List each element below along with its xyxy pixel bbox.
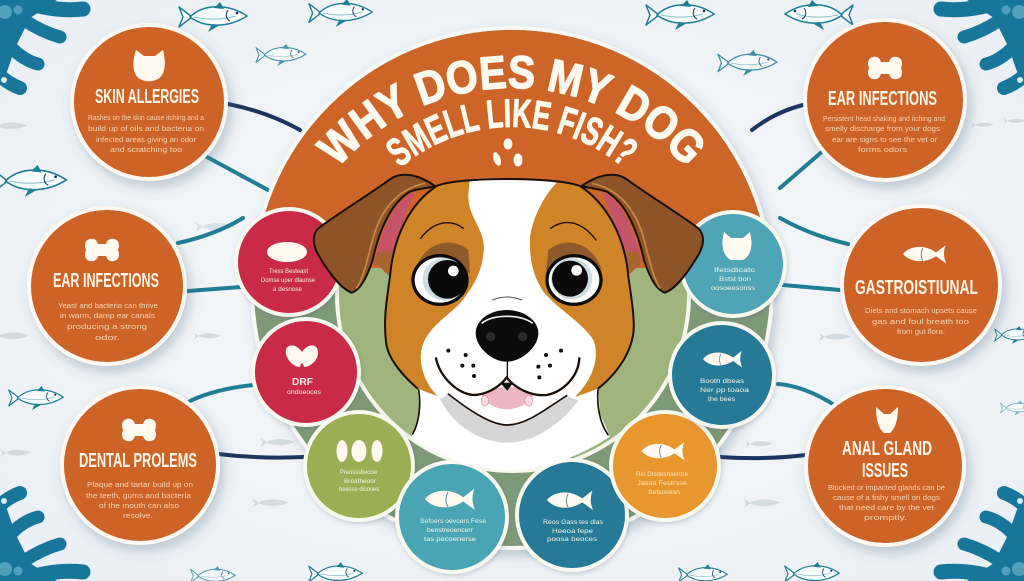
title: SMELL LIKE FISH? xyxy=(386,98,638,166)
corner splash: top right xyxy=(941,0,1024,88)
text: red 1 lines: Domse uper dlaunse xyxy=(261,277,315,284)
text: green lines xyxy=(339,469,380,493)
text: green lines: beesso disoses xyxy=(339,486,380,493)
body text: producing a strong xyxy=(67,324,147,331)
text: teal right lines: Bstst bon xyxy=(719,276,751,283)
panel: anal gland issues xyxy=(806,387,964,545)
body text: promptly. xyxy=(864,515,907,522)
heading: SKIN ALLERGIES xyxy=(95,86,199,108)
corner splash: bottom right xyxy=(941,493,1024,581)
body text xyxy=(58,303,158,342)
body text: Rashes on the skin cause itching and a xyxy=(88,115,204,122)
icon: fish xyxy=(903,245,946,264)
body text: ear are signs to see the vet or xyxy=(832,137,938,144)
central medallion xyxy=(250,26,774,550)
nose xyxy=(476,310,538,362)
icon: cat head xyxy=(722,232,752,260)
body text: that need care by the vet xyxy=(839,505,934,512)
icon: bone xyxy=(868,57,902,79)
neck lines xyxy=(413,390,608,435)
panel: dental problems xyxy=(62,387,218,543)
icon: fish xyxy=(547,491,593,510)
text: red 1 lines xyxy=(261,268,315,293)
chin shadow xyxy=(440,394,578,443)
panel: small circle blue bottom xyxy=(517,460,627,570)
icon: bone xyxy=(85,239,119,261)
body text: Persistent head shaking and itching and xyxy=(823,116,945,123)
heading: ISSUES xyxy=(862,460,908,482)
body text: build up of oils and bacteria on xyxy=(88,126,204,133)
text: blue right lines xyxy=(700,378,749,403)
head outline xyxy=(385,179,634,388)
icon: lungs xyxy=(286,345,318,367)
text: green lines: Preosssbeccer xyxy=(340,469,379,476)
text: blue lines xyxy=(543,519,604,543)
text: blue lines: poosa beoces xyxy=(547,536,598,543)
right ear xyxy=(582,175,703,293)
eye patches and brows xyxy=(415,222,602,273)
text: blue lines: Reos Gass tes dlas xyxy=(543,519,604,526)
corner splash: bottom left xyxy=(0,493,83,581)
icon: bowl xyxy=(267,242,307,262)
panel: ear infections left xyxy=(29,208,185,364)
body text: forms odors xyxy=(858,147,908,154)
text: red 1 lines: a desnose xyxy=(273,286,302,293)
icon: three teeth xyxy=(336,440,382,462)
icon: gland xyxy=(876,407,898,433)
mouth xyxy=(436,358,579,425)
body text: cause of a fishy smell on dogs xyxy=(833,495,941,502)
panel: small circle orange xyxy=(611,412,719,520)
heading xyxy=(842,438,932,482)
body text: Yeast and bacteria can thrive xyxy=(58,303,158,310)
text: blue right lines: Ner pp toaoa xyxy=(700,387,749,394)
text: red 2 line: ondoeoces xyxy=(287,389,322,396)
panel: small circle teal right xyxy=(681,212,785,316)
icon: smell droplets xyxy=(491,138,522,167)
text: green lines: Broatheoor xyxy=(344,478,377,485)
panel: small circle red 1 xyxy=(236,209,342,315)
text: orange lines: Rin Disdeshserore xyxy=(636,471,688,478)
icon: fish xyxy=(642,442,685,461)
text: orange lines xyxy=(636,471,688,496)
panel: skin allergies xyxy=(72,25,226,179)
text: blue right lines: the bees xyxy=(708,396,736,403)
whisker dots xyxy=(446,349,563,379)
heading: ANAL GLAND xyxy=(842,438,932,460)
text: red 1 lines: Tress Besteast xyxy=(269,268,308,275)
title: WHY DOES MY DOG xyxy=(314,55,704,164)
text: teal lines: benstreoencerr xyxy=(427,527,474,534)
icon: cat head xyxy=(133,50,165,81)
icon: fish xyxy=(703,351,742,368)
dog illustration xyxy=(314,175,703,470)
panel: gastrointestinal xyxy=(842,206,1000,364)
body text xyxy=(823,116,945,154)
left ear xyxy=(314,175,435,293)
connector lines xyxy=(178,104,848,458)
text: blue right lines: Booth dbeas xyxy=(700,378,745,385)
text: blue lines: Heeoa fepe xyxy=(552,528,593,535)
head xyxy=(385,179,634,407)
text: DRF label: DRF xyxy=(292,377,313,388)
text: orange lines: Jasso Festrsse xyxy=(637,480,687,487)
body text: gas and foul breath too xyxy=(872,319,969,326)
body text: odor. xyxy=(95,335,120,342)
body text: from gut flora. xyxy=(897,329,945,336)
icon: bone xyxy=(122,419,156,441)
body text: the teeth, gums and bacteria xyxy=(86,493,191,500)
body text: resolve. xyxy=(123,513,153,520)
body text xyxy=(86,482,193,520)
body text: in warm, damp ear canals xyxy=(60,313,156,320)
text: teal right lines xyxy=(711,267,756,292)
icon: fish xyxy=(425,489,475,510)
body text: Plaque and tartar build up on xyxy=(87,482,193,489)
left eye xyxy=(411,254,469,306)
body text: Blocked or impacted glands can be xyxy=(828,485,945,492)
heading: DENTAL PROLEMS xyxy=(79,450,197,472)
body text: Diets and stomach upsets cause xyxy=(865,308,977,315)
body text xyxy=(88,115,204,154)
body text: of the mouth can also xyxy=(99,503,179,510)
heading: EAR INFECTIONS xyxy=(53,270,159,292)
text: teal lines: tas pecoenerse xyxy=(424,536,476,543)
text: teal right lines: oosoeesonss xyxy=(711,285,756,292)
text: teal right lines: Ifetsdtcatc xyxy=(714,267,756,274)
text: teal lines: Sefoers oevcers Fese xyxy=(420,518,486,525)
body text: smelly discharge from your dogs xyxy=(825,126,941,133)
corner splash: top left xyxy=(0,0,83,88)
panel: small circle blue right xyxy=(670,323,774,427)
text: teal lines xyxy=(420,518,486,543)
body text xyxy=(828,485,945,522)
panel: small circle red 2 xyxy=(253,319,359,425)
panel: small circle teal bottom xyxy=(397,462,507,572)
panel: ear infections right xyxy=(805,20,965,180)
text: orange lines: Setsosesn xyxy=(648,489,680,496)
right eye xyxy=(545,254,603,306)
body text: infected areas giving an odor xyxy=(96,137,197,144)
muzzle wrinkle xyxy=(493,297,522,300)
body text xyxy=(865,308,977,336)
heading: EAR INFECTIONS xyxy=(828,88,937,110)
white blaze and muzzle xyxy=(421,178,596,423)
neck and chest xyxy=(412,387,610,470)
body text: and scratching too xyxy=(110,147,182,154)
panel: small circle green xyxy=(305,412,413,520)
